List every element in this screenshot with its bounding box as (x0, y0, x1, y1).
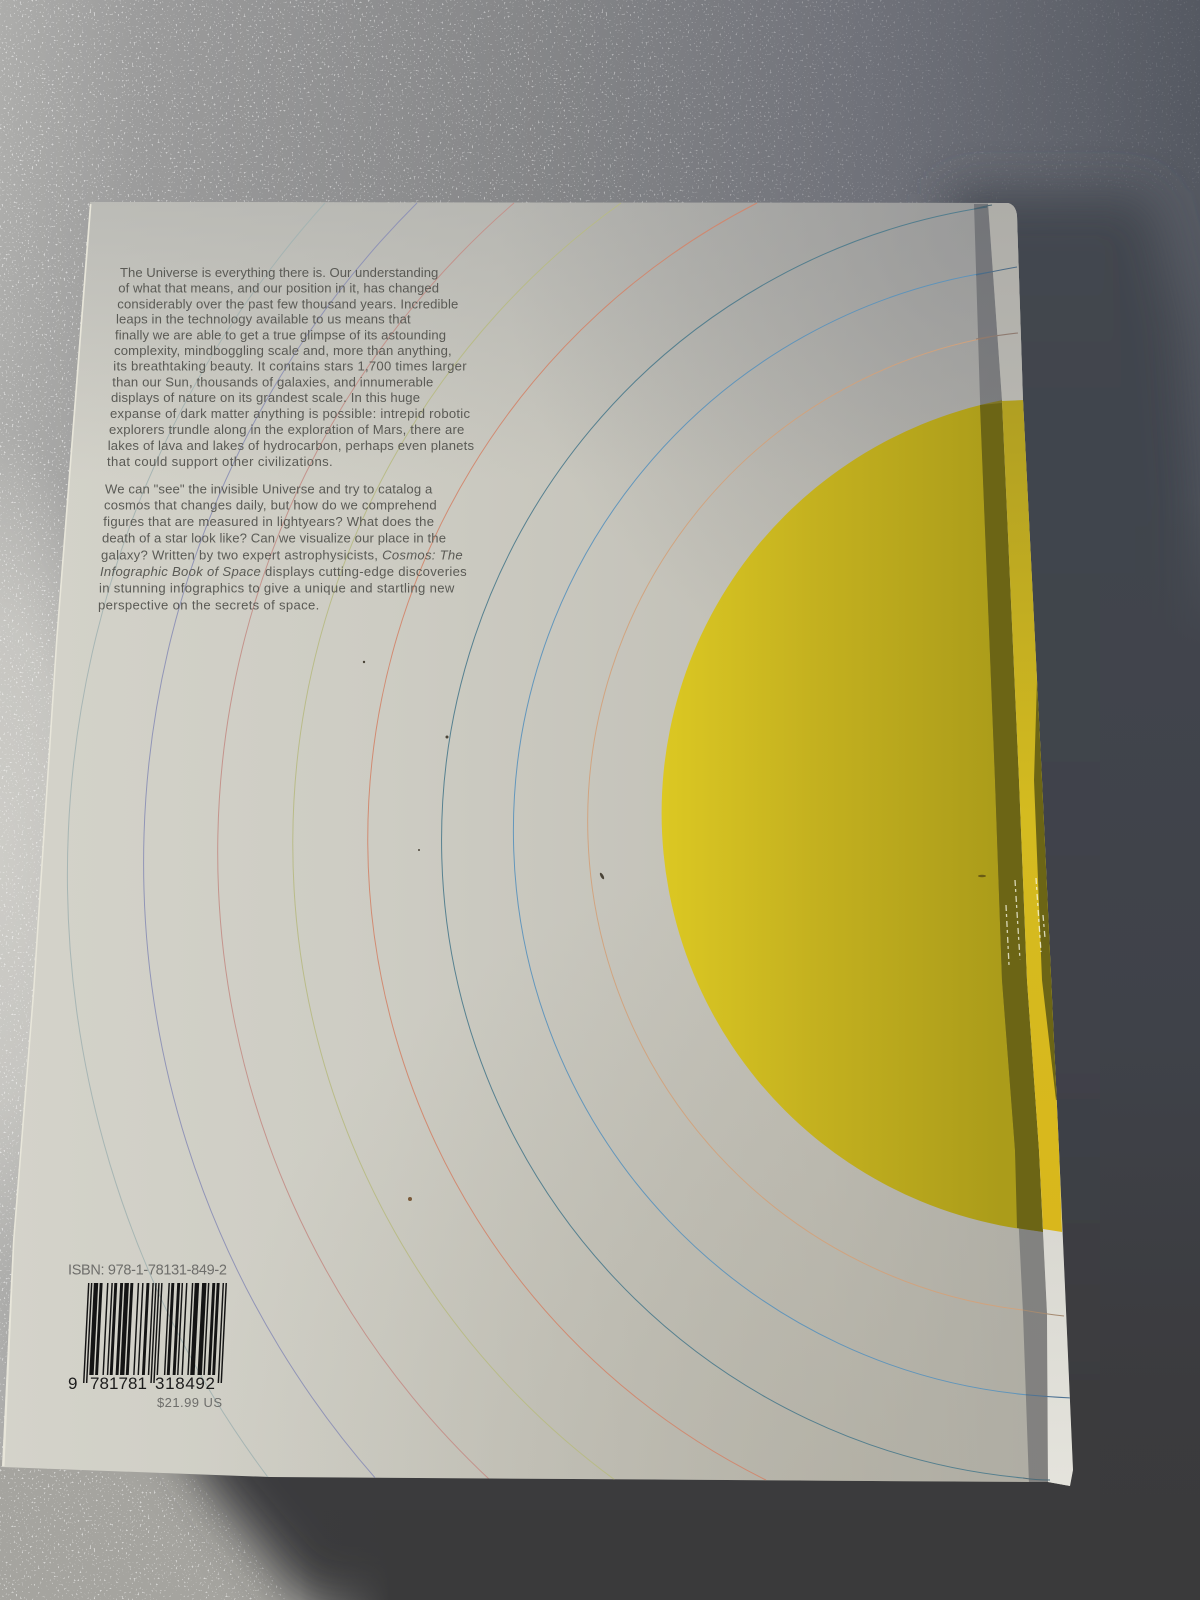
paragraph 1: complexity, mindboggling scale and, more than anything, (114, 343, 452, 358)
cover edge highlight (3, 204, 90, 1466)
spine hinge groove (974, 204, 1048, 1484)
paragraph 1: of what that means, and our position in it, has changed (118, 281, 439, 296)
barcode digits: 781781 (90, 1374, 147, 1393)
rings continuing across the spine (974, 205, 1072, 1480)
paragraph 2: galaxy? Written by two expert astrophysicists, Cosmos: The (101, 547, 463, 562)
paragraph 1: than our Sun, thousands of galaxies, and innumerable (112, 374, 433, 389)
shadow cast by the book (170, 194, 1200, 1600)
paragraph 1: that could support other civilizations. (107, 454, 333, 469)
cover face (0, 200, 1100, 1490)
spine strip (988, 202, 1073, 1486)
paragraph 2: Infographic Book of Space displays cutting-edge discoveries (100, 564, 467, 579)
body copy (98, 265, 474, 612)
paragraph 1: finally we are able to get a true glimpse of its astounding (115, 327, 446, 342)
paragraph 2: cosmos that changes daily, but how do we comprehend (104, 498, 437, 513)
gloss highlights on the spine (1006, 878, 1045, 965)
paragraph 2: figures that are measured in lightyears? What does the (103, 514, 434, 529)
concentric orbit rings (67, 203, 1029, 1480)
paragraph 2: We can "see" the invisible Universe and try to catalog a (105, 481, 433, 496)
paragraph 1: considerably over the past few thousand years. Incredible (117, 296, 458, 311)
paragraph 1: The Universe is everything there is. Our understanding (120, 265, 438, 280)
paragraph 2: in stunning infographics to give a unique and startling new (99, 581, 455, 596)
paragraph 1: explorers trundle along in the exploration of Mars, there are (109, 422, 464, 437)
paragraph 1: leaps in the technology available to us means that (116, 312, 411, 327)
paragraph 2: death of a star look like? Can we visualize our place in the (102, 531, 446, 546)
paragraph 1: expanse of dark matter anything is possible: intrepid robotic (110, 406, 470, 421)
barcode digits: 318492 (155, 1374, 215, 1393)
ISBN label: ISBN: 978-1-78131-849-2 (68, 1262, 227, 1278)
barcode digits (68, 1374, 215, 1393)
paragraph 1: displays of nature on its grandest scale. In this huge (111, 390, 420, 405)
paragraph 1: lakes of lava and lakes of hydrocarbon, perhaps even planets (108, 438, 474, 453)
barcode digits: 9 (68, 1374, 77, 1393)
yellow sun circle (662, 396, 1063, 1233)
panel: book back cover (2, 202, 1073, 1486)
barcode (83, 1283, 227, 1383)
paragraph 2: perspective on the secrets of space. (98, 597, 319, 612)
paragraph 2 (98, 481, 467, 612)
price: $21.99 US (157, 1395, 222, 1410)
paragraph 1: its breathtaking beauty. It contains stars 1,700 times larger (113, 359, 467, 374)
paragraph 1 (107, 265, 474, 469)
scuffs and specks (363, 661, 986, 1201)
